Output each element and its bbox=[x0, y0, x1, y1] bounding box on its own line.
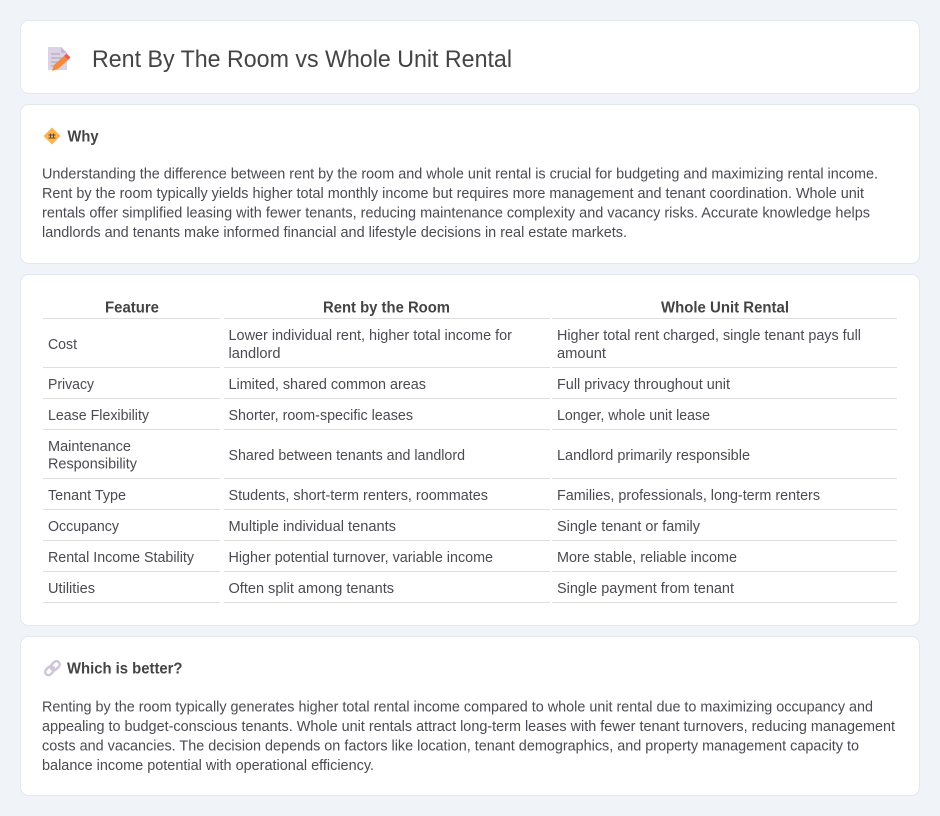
icon: diamond sign bbox=[44, 128, 60, 144]
heading: which is better: Which is better? bbox=[67, 660, 182, 678]
text block: why bbox=[42, 166, 878, 241]
row: maintenance responsibility: Maintenance bbox=[48, 439, 131, 455]
row: rental income stability: Rental Income Stability bbox=[48, 550, 195, 566]
row: occupancy: Multiple individual tenants bbox=[228, 519, 396, 535]
row: lease flexibility bbox=[48, 408, 710, 424]
table header: Rent by the Room bbox=[323, 300, 450, 316]
row: tenant type: Families, professionals, long-term renters bbox=[557, 488, 820, 504]
icon: document with pencil bbox=[48, 47, 70, 71]
table header bbox=[105, 300, 789, 316]
panel: header bbox=[20, 20, 920, 94]
row: rental income stability: More stable, reliable income bbox=[557, 550, 737, 566]
row: maintenance responsibility: Responsibility bbox=[48, 456, 138, 472]
text block: why: Understanding the difference between rent by the room and whole unit rental is crucial for budgeting and maximizing rental income. bbox=[42, 166, 878, 182]
text block: which is better: Renting by the room typically generates higher total rental income compared to whole unit rental due to maximizing occupancy and bbox=[42, 700, 873, 716]
row: maintenance responsibility: Landlord primarily responsible bbox=[557, 448, 750, 464]
text block: which is better bbox=[42, 700, 895, 774]
row: utilities bbox=[48, 581, 734, 597]
row: utilities: Utilities bbox=[48, 581, 95, 597]
row: tenant type: Students, short-term renters, roommates bbox=[228, 488, 488, 504]
row: tenant type bbox=[48, 488, 820, 504]
row: privacy: Full privacy throughout unit bbox=[557, 377, 730, 393]
icon: link chain bbox=[44, 660, 61, 677]
title: Rent By The Room vs Whole Unit Rental bbox=[92, 46, 512, 73]
row: occupancy: Single tenant or family bbox=[557, 519, 701, 535]
row: cost: amount bbox=[557, 346, 606, 362]
row: cost: landlord bbox=[228, 346, 280, 362]
row: cost: Lower individual rent, higher total income for bbox=[228, 328, 512, 344]
panel: comparison table bbox=[20, 274, 920, 626]
row: cost: Higher total rent charged, single tenant pays full bbox=[557, 328, 861, 344]
row: lease flexibility: Longer, whole unit lease bbox=[557, 408, 710, 424]
heading: why: Why bbox=[68, 128, 99, 146]
row: maintenance responsibility: Shared between tenants and landlord bbox=[228, 448, 465, 464]
text block: which is better: appealing to budget-conscious tenants. Whole unit rentals attract long-term leases with fewer tenant turnovers, reducing management bbox=[42, 719, 895, 735]
table header: Feature bbox=[105, 300, 159, 316]
row: utilities: Single payment from tenant bbox=[557, 581, 734, 597]
row: cost: Cost bbox=[48, 337, 77, 353]
row: rental income stability bbox=[48, 550, 737, 566]
panel: which is better bbox=[20, 636, 920, 796]
row: occupancy bbox=[48, 519, 701, 535]
text block: which is better: costs and vacancies. The decision depends on factors like location, tenant demographics, and property management capacity to bbox=[42, 738, 859, 754]
row: maintenance responsibility bbox=[48, 439, 750, 472]
text block: why: rentals offer simplified leasing with fewer tenants, reducing maintenance complexity and vacancy risks. Accurate knowledge helps bbox=[42, 206, 870, 222]
row: lease flexibility: Shorter, room-specific leases bbox=[228, 408, 413, 424]
row: lease flexibility: Lease Flexibility bbox=[48, 408, 150, 424]
table header: Whole Unit Rental bbox=[661, 300, 789, 316]
row: utilities: Often split among tenants bbox=[228, 581, 394, 597]
text block: why: Rent by the room typically yields higher total monthly income but requires more management and tenant coordination. Whole unit bbox=[42, 186, 864, 202]
text block: which is better: balance income potential with operational efficiency. bbox=[42, 758, 374, 774]
row: occupancy: Occupancy bbox=[48, 519, 120, 535]
text block: why: landlords and tenants make informed financial and lifestyle decisions in real estate markets. bbox=[42, 225, 627, 241]
row: tenant type: Tenant Type bbox=[48, 488, 126, 504]
row: privacy: Privacy bbox=[48, 377, 95, 393]
row: rental income stability: Higher potential turnover, variable income bbox=[228, 550, 493, 566]
panel: why bbox=[20, 104, 920, 264]
row: cost bbox=[48, 328, 861, 362]
row: privacy: Limited, shared common areas bbox=[228, 377, 426, 393]
row: privacy bbox=[48, 377, 730, 393]
